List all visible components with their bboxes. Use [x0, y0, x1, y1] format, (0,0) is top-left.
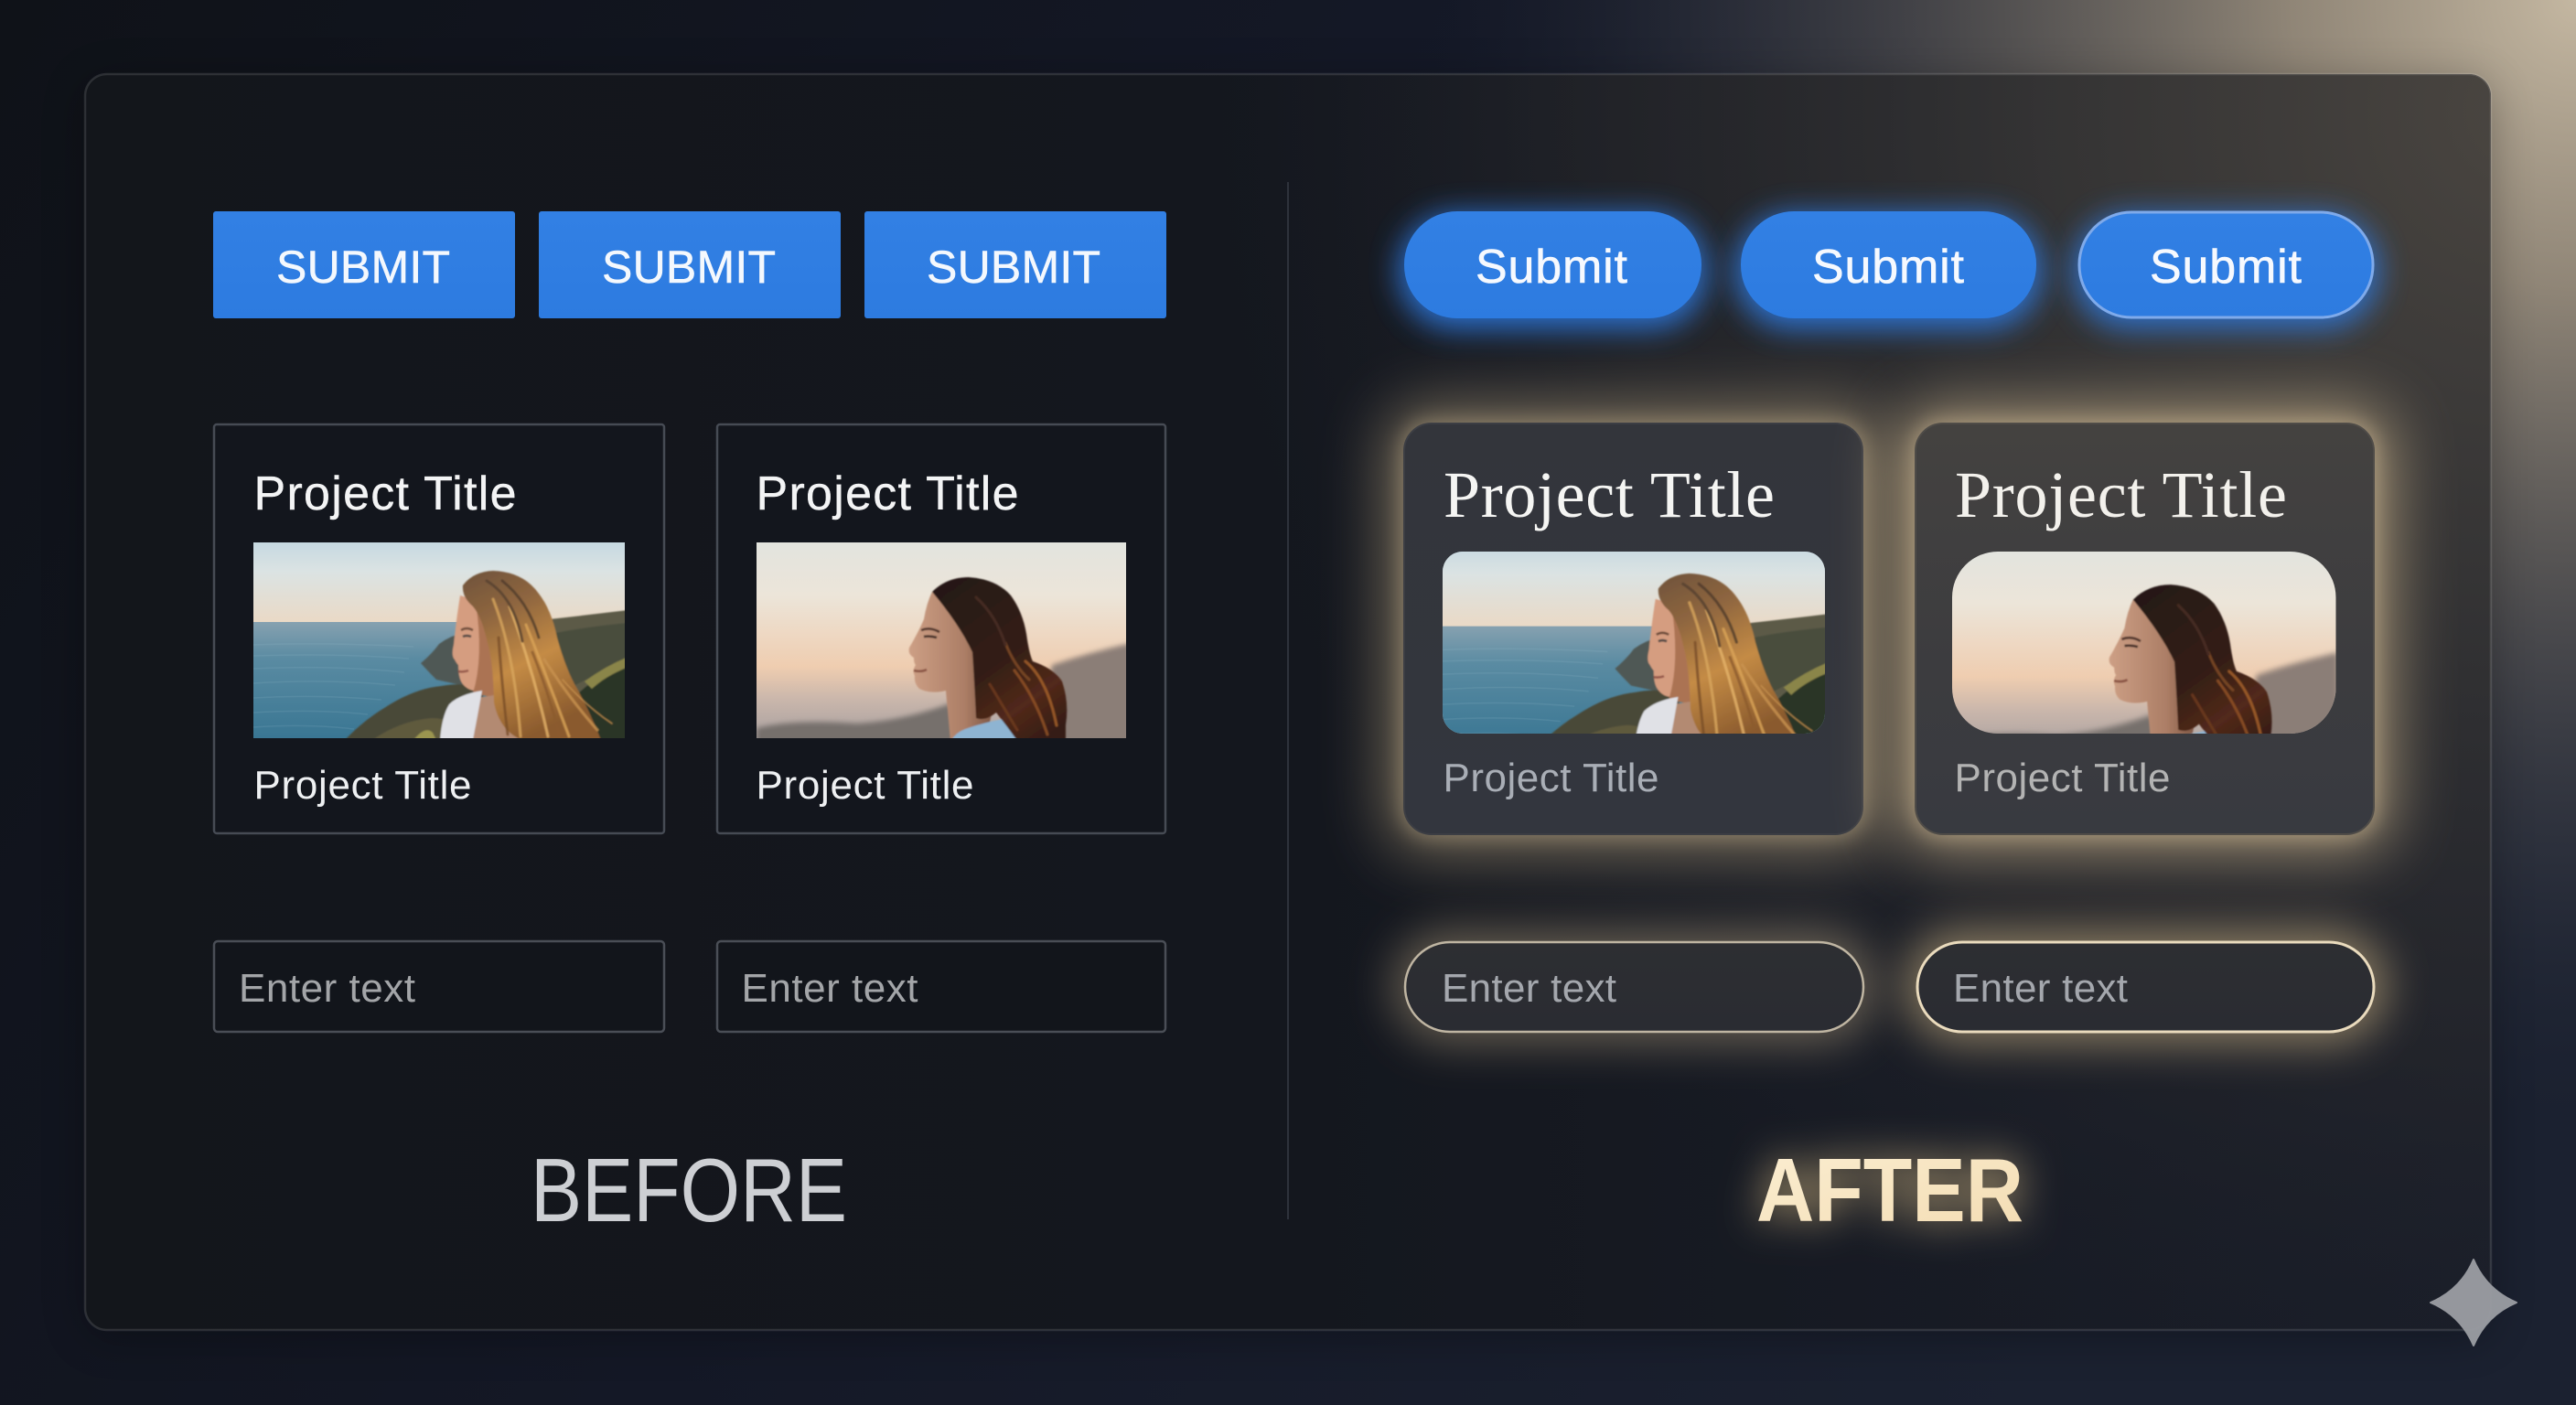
input: after field 2: Enter text	[1953, 966, 2128, 1011]
button: pill submit 2: Submit	[1812, 241, 1965, 294]
card: before project 2	[717, 424, 1165, 833]
heading: before: BEFORE	[531, 1140, 847, 1240]
button: pill submit 1	[1399, 211, 1707, 329]
button: square submit 3	[864, 211, 1166, 318]
panel: after column	[1386, 211, 2392, 1240]
input: before field 1	[214, 941, 664, 1032]
heading: after: AFTER	[1756, 1140, 2023, 1240]
photo: profile woman	[757, 542, 1126, 738]
button: pill submit 3	[2073, 212, 2379, 329]
photo: coastline woman rounded	[1443, 552, 1825, 734]
button: square submit 1	[213, 211, 515, 318]
input: after field 2	[1905, 929, 2387, 1044]
button: pill submit 1: Submit	[1476, 241, 1628, 294]
photo: coastline woman	[253, 542, 625, 738]
input: after field 1: Enter text	[1442, 966, 1616, 1011]
input: after field 1	[1392, 929, 1875, 1044]
card: before project 1	[214, 424, 664, 833]
button: square submit 3: SUBMIT	[927, 241, 1100, 293]
card: before project 1: Project Title	[254, 763, 472, 808]
button: square submit 2	[539, 211, 841, 318]
button: pill submit 2	[1735, 211, 2042, 329]
input: before field 1: Enter text	[239, 966, 415, 1011]
card: after project 1: Project Title	[1444, 756, 1659, 800]
input: before field 2: Enter text	[741, 966, 918, 1011]
card: after project 1: Project Title	[1444, 458, 1775, 531]
card: after project 2	[1897, 405, 2392, 853]
card: before project 2: Project Title	[756, 467, 1019, 520]
after buttons row	[1399, 211, 2379, 329]
input: before field 2	[717, 941, 1165, 1032]
panel: before column	[213, 211, 1166, 1240]
card: before project 1: Project Title	[254, 467, 516, 520]
button: square submit 1: SUBMIT	[276, 241, 450, 293]
card: after project 2: Project Title	[1955, 458, 2287, 531]
button: square submit 2: SUBMIT	[602, 241, 776, 293]
card: after project 2: Project Title	[1954, 756, 2170, 800]
card: before project 2: Project Title	[756, 763, 973, 808]
button: pill submit 3: Submit	[2150, 241, 2302, 294]
icon: four-point sparkle	[2431, 1260, 2517, 1346]
before buttons row	[213, 211, 1166, 318]
divider	[1287, 182, 1289, 1219]
photo: profile woman pill	[1952, 552, 2336, 734]
card: after project 1	[1386, 405, 1881, 853]
